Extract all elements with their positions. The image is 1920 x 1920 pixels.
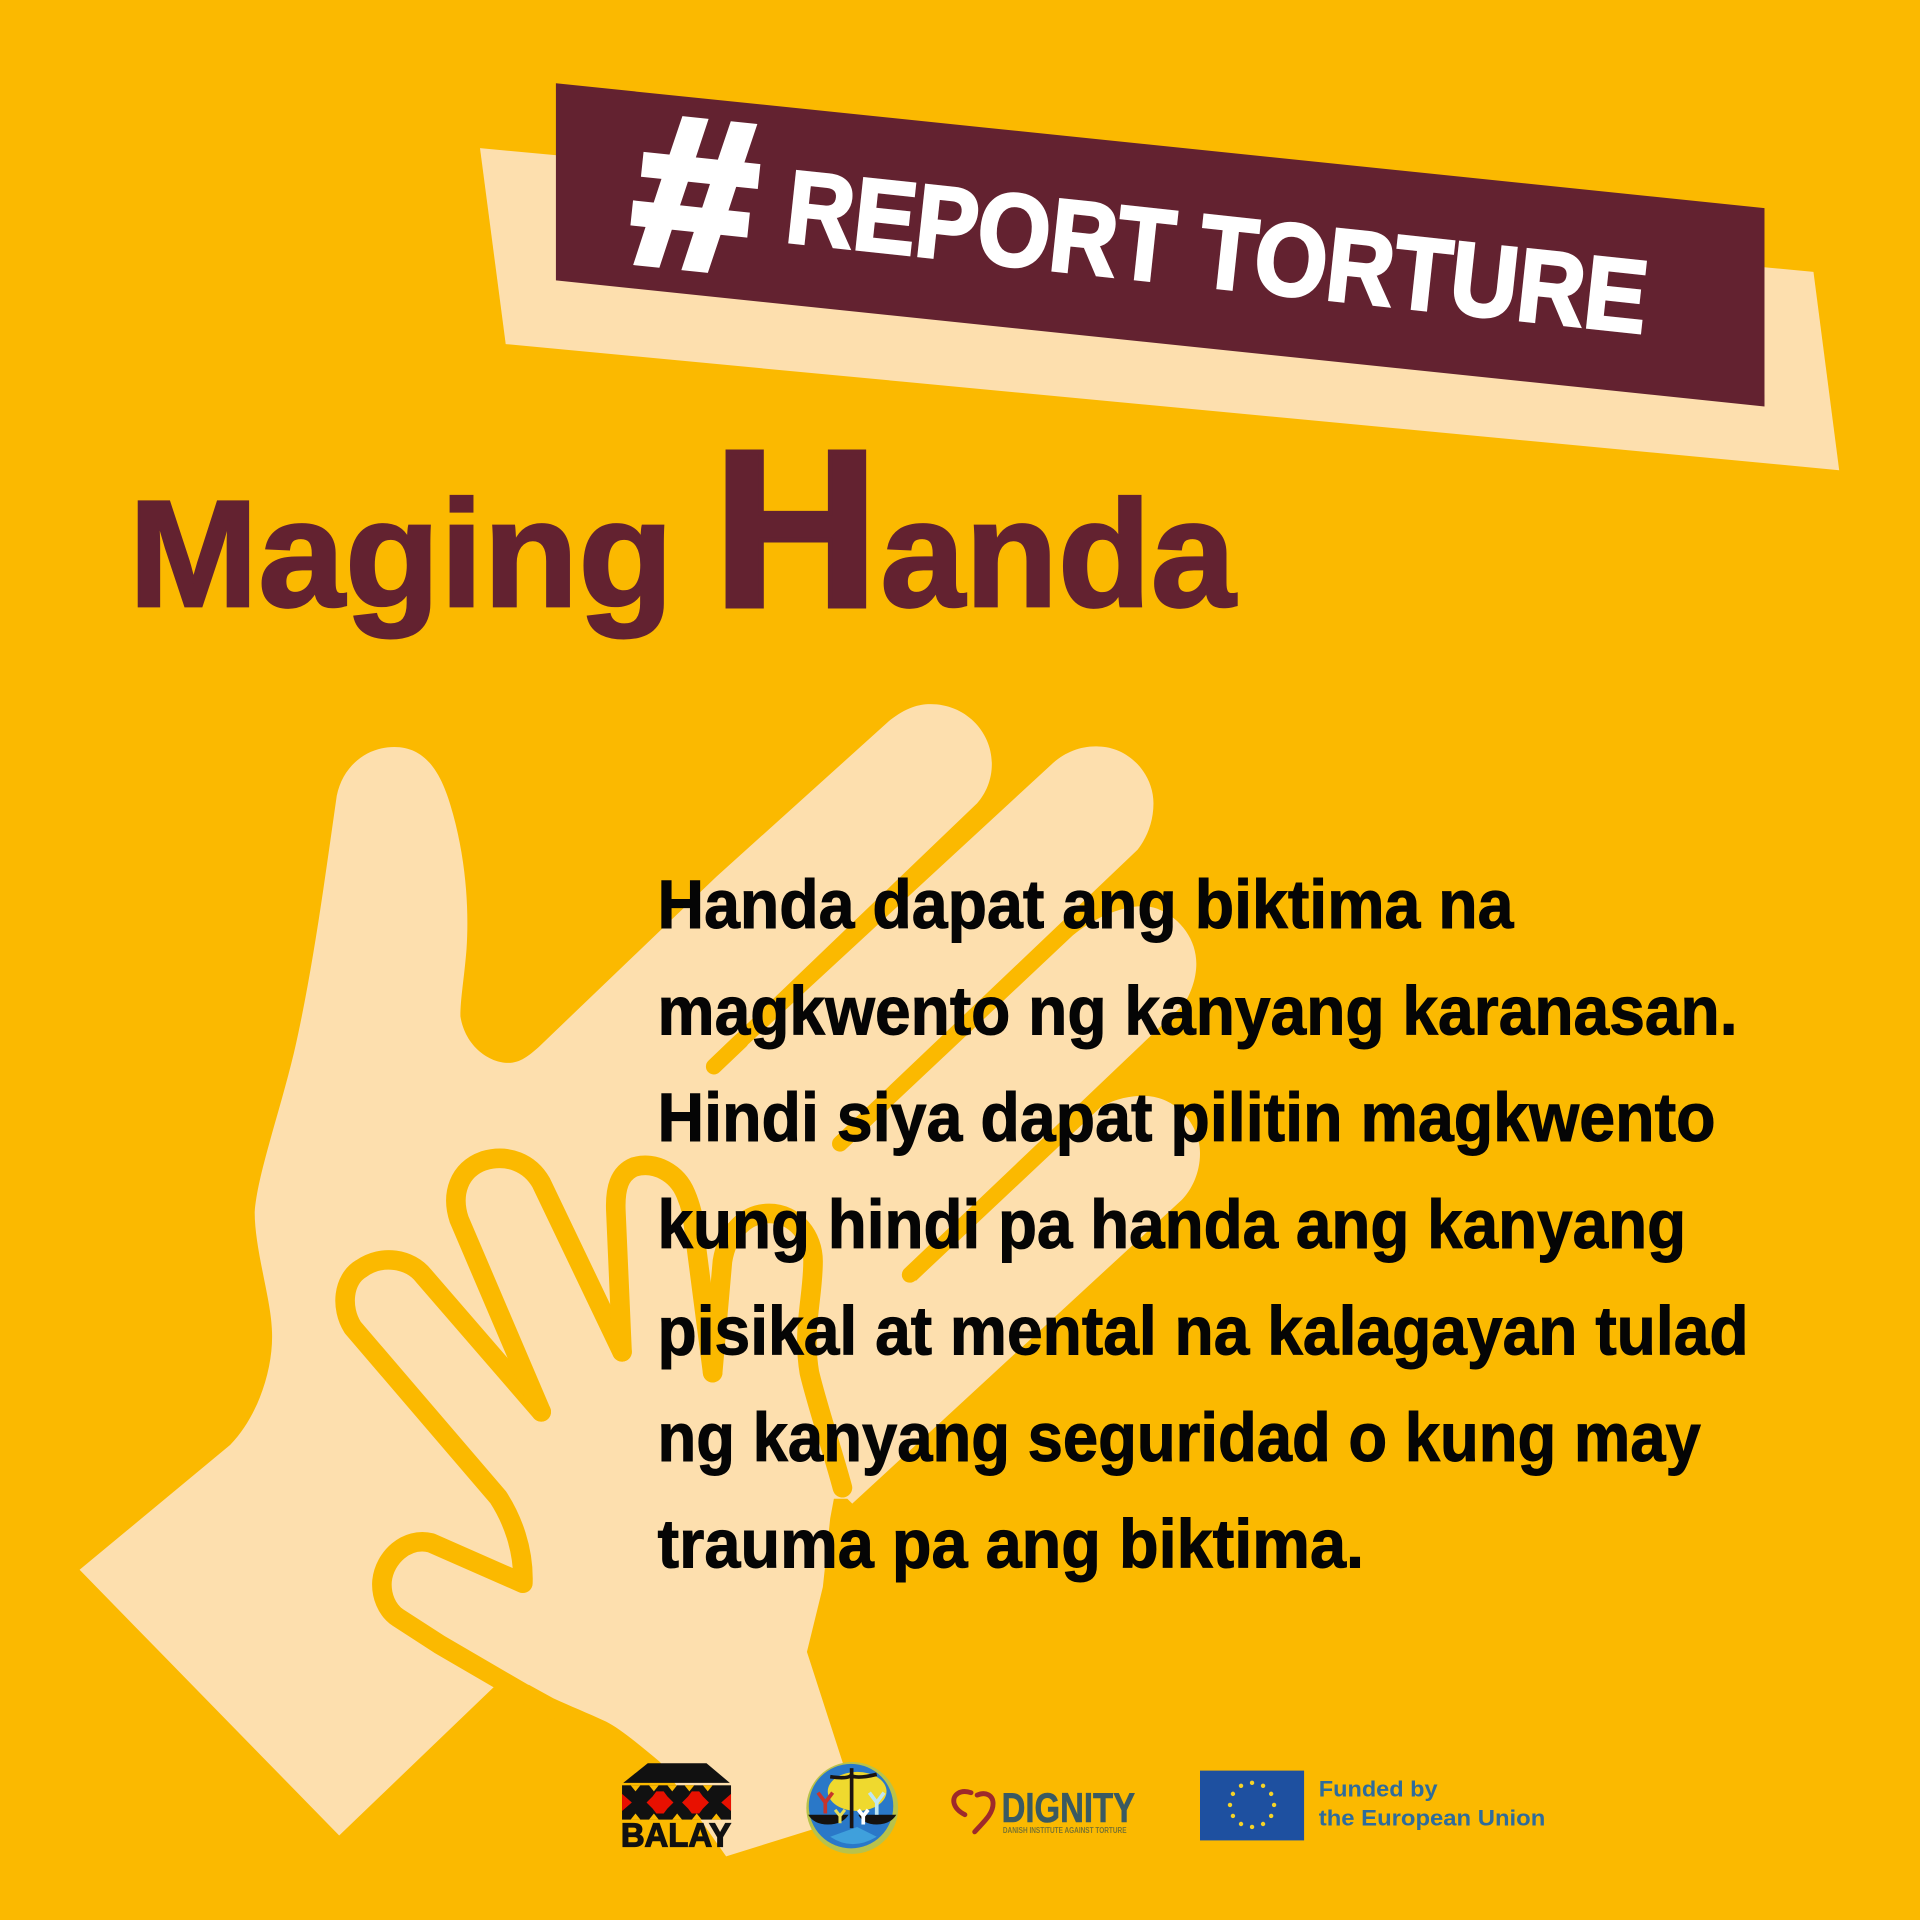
body text: magkwento ng kanyang karanasan. (658, 973, 1738, 1050)
body text: ng kanyang seguridad o kung may (658, 1399, 1701, 1476)
title: Maging (129, 470, 673, 639)
banner cream backing (480, 148, 1839, 470)
title: H (713, 404, 879, 654)
hash symbol: # (623, 70, 767, 317)
body text: kung hindi pa handa ang kanyang (658, 1186, 1686, 1263)
logo: EU flag and funding text: Funded by (1319, 1776, 1438, 1801)
body text: Hindi siya dapat pilitin magkwento (658, 1079, 1716, 1156)
logo: Balay (621, 1763, 731, 1855)
title: anda (880, 470, 1237, 639)
small hand outline (345, 1158, 842, 1709)
banner: report torture (480, 70, 1839, 470)
icon: two hands (80, 704, 1200, 1856)
title (129, 404, 1237, 654)
body text: Handa dapat ang biktima na (658, 866, 1514, 943)
large hand silhouette (80, 704, 1200, 1856)
banner maroon strip (556, 83, 1764, 407)
banner text: REPORT TORTURE (781, 149, 1653, 355)
finger gap ends (714, 1041, 937, 1275)
logo: Dignity: DANISH INSTITUTE AGAINST TORTURE (1003, 1825, 1127, 1835)
body text: trauma pa ang biktima. (658, 1505, 1364, 1582)
logo: EU flag and funding text (1200, 1771, 1545, 1840)
logo: Dignity (954, 1784, 1135, 1835)
logo: justice scales globe (806, 1762, 898, 1854)
body text: pisikal at mental na kalagayan tulad (658, 1292, 1749, 1369)
logo: EU flag and funding text: the European Union (1319, 1806, 1545, 1831)
body text (658, 866, 1749, 1582)
logo: Balay: BALAY (621, 1818, 731, 1855)
logo: Dignity: DIGNITY (1002, 1784, 1135, 1831)
